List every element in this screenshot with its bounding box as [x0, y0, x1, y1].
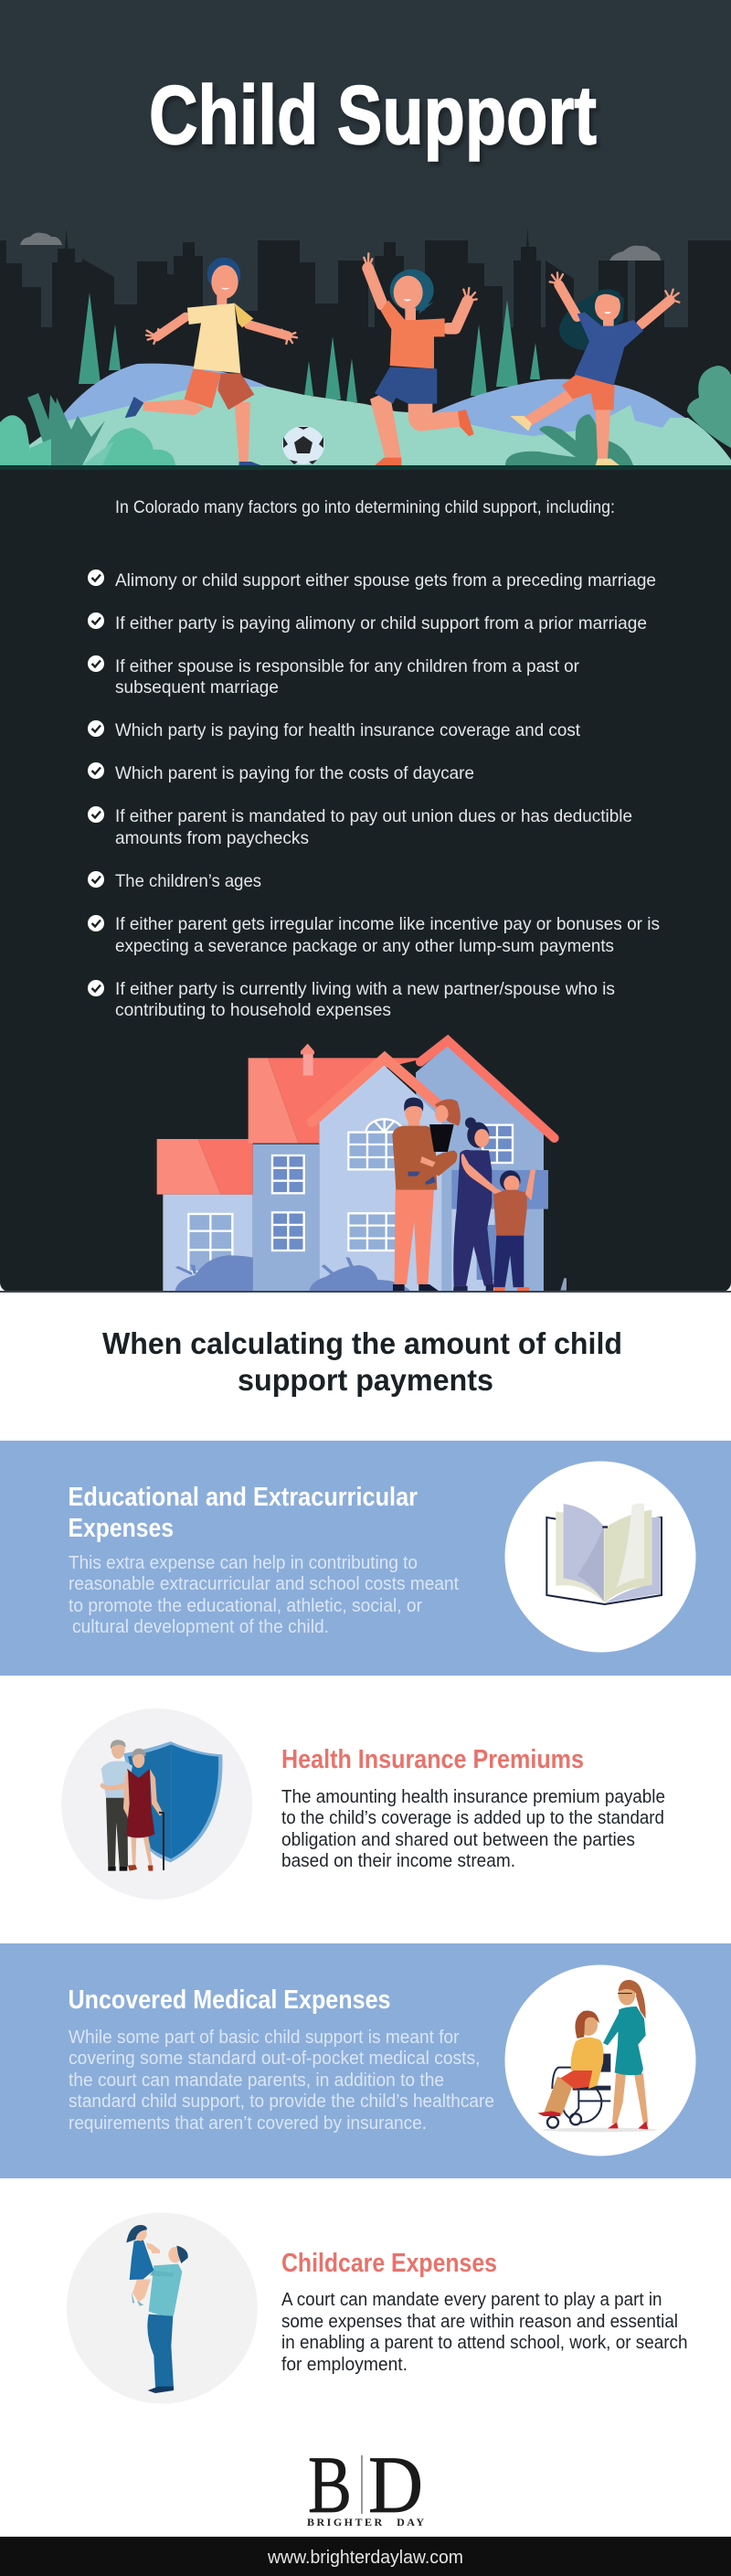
body text: requirements that aren’t covered by insurance. [69, 2113, 427, 2134]
body text: obligation and shared out between the parties [281, 1830, 635, 1850]
heading: Childcare Expenses [281, 2249, 497, 2278]
footer bar [0, 2537, 731, 2576]
child: boy in yellow shirt [125, 258, 297, 465]
heading: Educational and Extracurricular [68, 1483, 418, 1512]
child [132, 2279, 151, 2302]
body text: This extra expense can help in contributing to [69, 1553, 418, 1573]
item 8 [88, 914, 660, 956]
icon circle [504, 1965, 696, 2156]
section heading: When calculating the amount of child [102, 1326, 622, 1360]
footer bar: www.brighterdaylaw.com [267, 2548, 463, 2568]
checklist [88, 569, 660, 1020]
ground strip [0, 465, 731, 470]
body text: in enabling a parent to attend school, work, or search [281, 2333, 687, 2353]
panel: hero illustration [0, 0, 731, 470]
cloud left [20, 232, 62, 245]
boy [493, 1170, 535, 1292]
section heading: support payments [238, 1363, 493, 1397]
woman [453, 1117, 503, 1292]
pine trees [79, 293, 540, 402]
item 6: If either parent is mandated to pay out union dues or has deductible [115, 806, 632, 826]
city skyline [0, 227, 731, 468]
icon circle [504, 1461, 696, 1653]
man [392, 1098, 440, 1292]
section heading [102, 1326, 622, 1397]
body text: While some part of basic child support is meant for [69, 2028, 460, 2048]
icon: couple and shield [100, 1740, 222, 1871]
woman [131, 1835, 153, 1866]
item 6 [88, 806, 632, 848]
item 3 [88, 655, 579, 697]
item 9: If either party is currently living with a new partner/spouse who is [115, 979, 615, 999]
heading [68, 1483, 418, 1543]
body text: the court can mandate parents, in addition to the [69, 2070, 444, 2091]
foliage right [505, 366, 731, 465]
logo: D [368, 2441, 423, 2530]
hills [0, 364, 731, 466]
item 4: Which party is paying for health insurance coverage and cost [115, 720, 581, 740]
item 1: Alimony or child support either spouse gets from a preceding marriage [115, 570, 656, 591]
body text: standard child support, to provide the child’s healthcare [69, 2092, 494, 2112]
icon: father lifting child [126, 2225, 188, 2393]
child: girl in blue shirt [510, 272, 679, 465]
body text [69, 2028, 494, 2134]
icon circle [67, 2212, 258, 2404]
title: Child Support [149, 69, 597, 162]
cloud right [609, 246, 661, 261]
soccer ball [282, 426, 324, 464]
item 9: contributing to household expenses [115, 1000, 391, 1020]
child: kid in orange shirt [364, 253, 477, 465]
father [147, 2315, 174, 2388]
item 2: If either party is paying alimony or child support from a prior marriage [115, 613, 647, 633]
body text: covering some standard out-of-pocket medical costs, [69, 2049, 481, 2069]
body text: based on their income stream. [281, 1851, 515, 1871]
logo: B [308, 2441, 352, 2530]
item 8: If either parent gets irregular income like incentive pay or bonuses or is [115, 914, 660, 934]
panel: factors list background [0, 470, 731, 1292]
body text: cultural development of the child. [72, 1617, 329, 1637]
panel: health insurance premiums [61, 1708, 665, 1900]
heading: Health Insurance Premiums [281, 1745, 584, 1774]
wheelchair [562, 2082, 601, 2123]
intro text: In Colorado many factors go into determining child support, including: [115, 497, 615, 517]
panel: educational expenses [0, 1441, 731, 1676]
icon: wheelchair and carer [537, 1980, 658, 2132]
foliage left [0, 393, 175, 465]
item 8: expecting a severance package or any other lump-sum payments [115, 936, 614, 956]
carer [636, 1986, 646, 2018]
item 6: amounts from paychecks [115, 828, 309, 848]
heading: Uncovered Medical Expenses [68, 1985, 391, 2015]
item 3: subsequent marriage [115, 677, 279, 697]
heading: Expenses [68, 1514, 174, 1543]
body text: reasonable extracurricular and school costs meant [69, 1574, 459, 1594]
body text: to promote the educational, athletic, social, or [69, 1596, 422, 1616]
panel: childcare expenses [67, 2212, 687, 2404]
item 5: Which parent is paying for the costs of daycare [115, 763, 474, 783]
girl held [408, 1099, 461, 1185]
body text: A court can mandate every parent to play a part in [281, 2290, 662, 2310]
man [106, 1798, 128, 1867]
item 3: If either spouse is responsible for any children from a past or [115, 656, 579, 676]
icon circle [61, 1708, 252, 1900]
body text [69, 1553, 459, 1637]
illustration: family in front of house [157, 1040, 567, 1292]
windows [188, 1119, 513, 1272]
icon: open book [546, 1503, 662, 1604]
item 7: The children’s ages [115, 871, 261, 891]
logo: BRIGHTER DAY [307, 2516, 424, 2528]
body text: for employment. [281, 2355, 408, 2375]
seated woman [544, 2077, 574, 2113]
body text [281, 2290, 687, 2375]
panel: uncovered medical expenses [0, 1943, 731, 2178]
line under panel [0, 1291, 731, 1293]
item 9 [88, 979, 615, 1020]
body text [281, 1787, 665, 1871]
bushes [175, 1255, 411, 1292]
logo [307, 2441, 424, 2530]
body text: The amounting health insurance premium payable [281, 1787, 665, 1807]
body text: to the child’s coverage is added up to the standard [281, 1808, 664, 1828]
body text: some expenses that are within reason and essential [281, 2312, 678, 2332]
